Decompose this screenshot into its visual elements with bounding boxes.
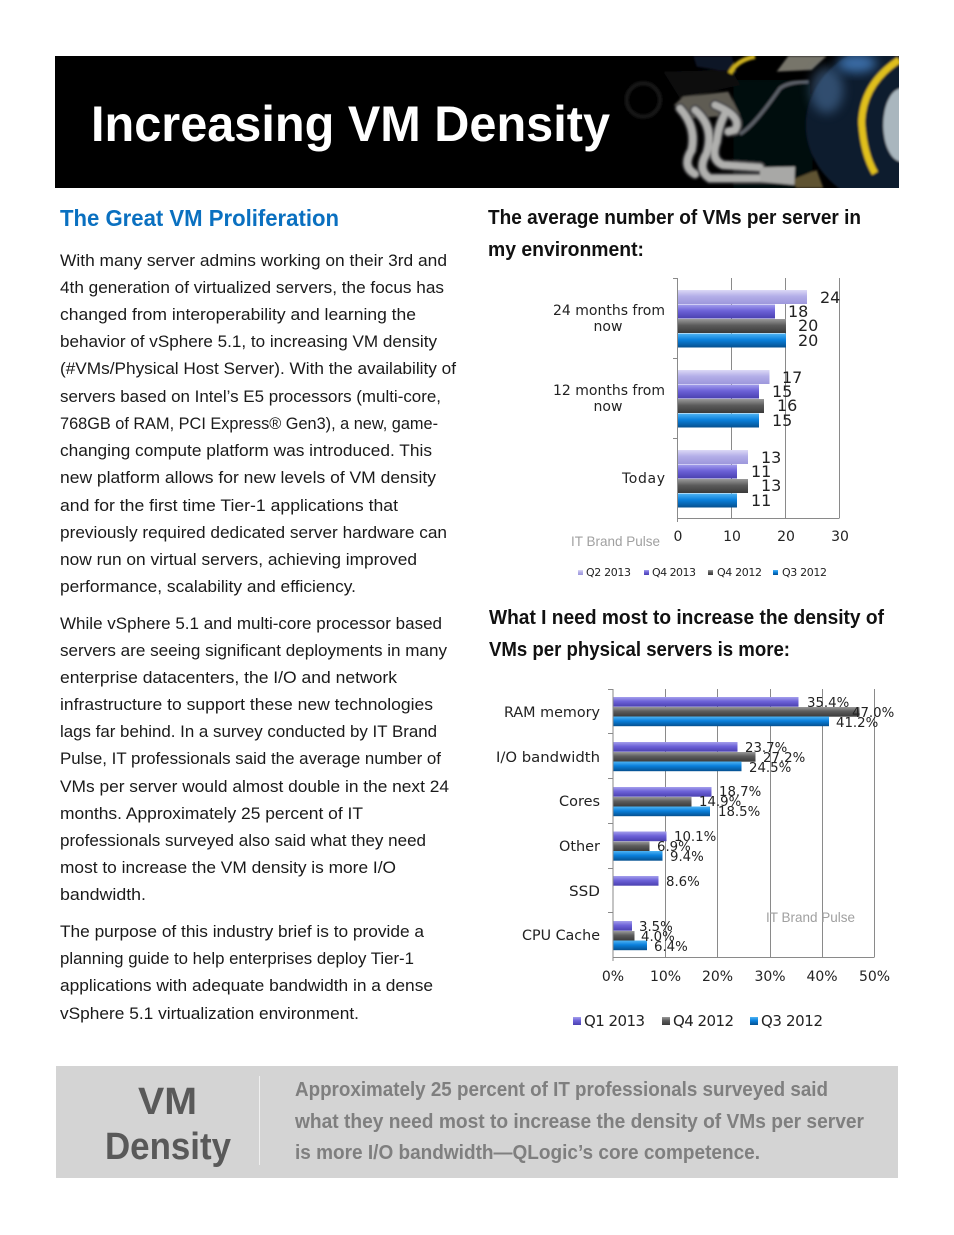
bars: I/O bandwidth (614, 742, 756, 771)
axis labels: 10% (650, 969, 681, 985)
axis labels: 0% (602, 969, 624, 985)
paragraph 1: new platform allows for new levels of VM density (60, 468, 437, 487)
paragraph 1: With many server admins working on their 3rd and (60, 251, 447, 270)
paragraph 1 (60, 251, 456, 596)
legend (573, 1012, 823, 1030)
category labels (553, 303, 665, 487)
paragraph 1: 4th generation of virtualized servers, the focus has (60, 278, 444, 297)
paragraph 3: applications with adequate bandwidth in a dense (60, 976, 433, 995)
data labels: 15 (772, 382, 792, 401)
heading: what is needed to increase density (489, 607, 884, 661)
data labels: 11 (751, 491, 771, 510)
axis labels: 30% (754, 969, 786, 985)
paragraph 2: While vSphere 5.1 and multi-core processor based (60, 614, 442, 633)
category labels: I/O bandwidth (496, 750, 600, 766)
bars: CPU Cache (614, 921, 647, 950)
axis labels: 0 (674, 529, 682, 545)
legend (578, 566, 827, 579)
paragraph 3: vSphere 5.1 virtualization environment. (60, 1004, 359, 1023)
axis labels (602, 969, 890, 985)
data labels: 4.0% (641, 930, 675, 945)
callout label: VM (138, 1081, 197, 1123)
axis labels: 10 (723, 529, 741, 545)
paragraph 2: VMs per server would almost double in the next 24 (60, 777, 449, 796)
callout label: Density (105, 1126, 231, 1168)
axis labels: 40% (806, 969, 838, 985)
paragraph 2: Pulse, IT professionals said the average number of (60, 749, 441, 768)
data labels: 6.4% (654, 940, 688, 955)
paragraph 2: most to increase the VM density is more I/O (60, 858, 396, 877)
legend: Q3 2012 (782, 566, 827, 579)
axis labels: 30 (831, 529, 849, 545)
paragraph 1: previously required dedicated server hardware can (60, 523, 447, 542)
paragraph 3 (60, 922, 433, 1023)
photo: engine exhaust and smoking tyre (624, 56, 899, 188)
callout text: is more I/O bandwidth—QLogic’s core competence. (295, 1142, 760, 1164)
paragraph 1: now run on virtual servers, achieving improved (60, 550, 417, 569)
bars: today (678, 450, 748, 508)
source note: IT Brand Pulse (571, 533, 660, 549)
legend: Q1 2013 (584, 1012, 645, 1030)
chart: what is needed most (496, 689, 894, 1030)
data labels: 14.9% (699, 795, 741, 810)
category labels: now (594, 399, 622, 415)
legend: Q3 2012 (761, 1012, 823, 1030)
callout text: Approximately 25 percent of IT professionals surveyed said (295, 1079, 828, 1101)
category labels: SSD (569, 884, 600, 900)
data labels: 35.4% (807, 696, 849, 711)
data labels: 47.0% (852, 706, 894, 721)
data labels (751, 288, 840, 510)
paragraph 2: infrastructure to support these new technologies (60, 695, 433, 714)
paragraph 2: bandwidth. (60, 885, 146, 904)
heading: average VMs per server: my environment: (488, 239, 644, 261)
bars: Other (614, 832, 666, 861)
bars: Cores (614, 787, 712, 816)
paragraph 3: The purpose of this industry brief is to provide a (60, 922, 425, 941)
paragraph 2: months. Approximately 25 percent of IT (60, 804, 363, 823)
paragraph 3: planning guide to help enterprises deploy Tier-1 (60, 949, 414, 968)
data labels: 11 (751, 462, 771, 481)
category labels (496, 705, 600, 944)
data labels: 18.5% (718, 805, 760, 820)
callout: VM Density (56, 1066, 898, 1178)
heading: average VMs per server (488, 207, 861, 261)
data labels: 18.7% (719, 785, 761, 800)
category labels: Cores (559, 794, 600, 810)
category labels: 12 months from (553, 383, 665, 399)
data labels: 17 (782, 368, 802, 387)
data labels: 8.6% (666, 875, 700, 890)
paragraph 2: lags far behind. In a survey conducted by IT Brand (60, 722, 437, 741)
data labels: 24 (820, 288, 840, 307)
bars: 12 months from now (678, 370, 770, 428)
paragraph 1: changed from interoperability and learning the (60, 305, 416, 324)
data labels: 20 (798, 316, 818, 335)
bars: 24 months from now (678, 290, 807, 348)
data labels: 3.5% (639, 920, 673, 935)
axis labels: 20% (702, 969, 733, 985)
paragraph 1: 768GB of RAM, PCI Express® Gen3), a new, game- (60, 414, 438, 433)
data labels (639, 696, 894, 955)
title: Increasing VM Density (91, 96, 610, 152)
data labels: 18 (788, 302, 808, 321)
bars: RAM memory (614, 697, 860, 726)
data labels: 9.4% (670, 850, 704, 865)
left column: article (60, 205, 456, 1023)
heading: average VMs per server: The average number of VMs per server in (488, 207, 861, 229)
legend: Q4 2012 (717, 566, 762, 579)
heading: what is needed to increase density: VMs per physical servers is more: (489, 639, 790, 661)
category labels: Other (559, 839, 600, 855)
category labels: CPU Cache (522, 928, 600, 944)
data labels: 41.2% (836, 716, 878, 731)
data labels: 15 (772, 411, 792, 430)
heading: what is needed to increase density: What I need most to increase the density of (489, 607, 884, 629)
bars: SSD (614, 876, 658, 886)
axis labels: 50% (859, 969, 890, 985)
category labels: RAM memory (504, 705, 600, 721)
paragraph 2 (60, 614, 449, 904)
data labels: 20 (798, 331, 818, 350)
data labels: 24.5% (749, 761, 791, 776)
category labels: now (594, 319, 622, 335)
data labels: 23.7% (745, 741, 787, 756)
legend: Q2 2013 (586, 566, 631, 579)
axis labels (674, 529, 849, 545)
paragraph 1: servers based on Intel’s E5 processors (multi-core, (60, 387, 441, 406)
data labels: 13 (761, 476, 781, 495)
source note: IT Brand Pulse (766, 909, 855, 925)
paragraph 2: servers are seeing significant deployments in many (60, 641, 447, 660)
callout text: what they need most to increase the density of VMs per server (294, 1111, 864, 1133)
paragraph 2: enterprise datacenters, the I/O and network (60, 668, 398, 687)
paragraph 1: behavior of vSphere 5.1, to increasing VM density (60, 332, 438, 351)
legend: Q4 2012 (673, 1012, 734, 1030)
chart: average VMs per server (553, 278, 849, 579)
paragraph 2: professionals surveyed also said what they need (60, 831, 426, 850)
category labels: 24 months from (553, 303, 665, 319)
paragraph 1: performance, scalability and efficiency. (60, 577, 356, 596)
data labels: 16 (777, 396, 797, 415)
paragraph 1: (#VMs/Physical Host Server). With the availability of (60, 359, 456, 378)
callout label (105, 1081, 231, 1168)
data labels: 13 (761, 448, 781, 467)
data labels: 27.2% (763, 751, 805, 766)
paragraph 1: and for the first time Tier-1 applications that (60, 496, 398, 515)
legend: Q4 2013 (652, 566, 696, 579)
heading: The Great VM Proliferation: The Great VM Proliferation (60, 205, 339, 231)
callout text (294, 1079, 864, 1164)
data labels: 6.9% (657, 840, 691, 855)
category labels: Today (621, 471, 665, 487)
data labels: 10.1% (674, 830, 716, 845)
axis labels: 20 (777, 529, 795, 545)
header banner (55, 56, 899, 188)
paragraph 1: changing compute platform was introduced. This (60, 441, 432, 460)
